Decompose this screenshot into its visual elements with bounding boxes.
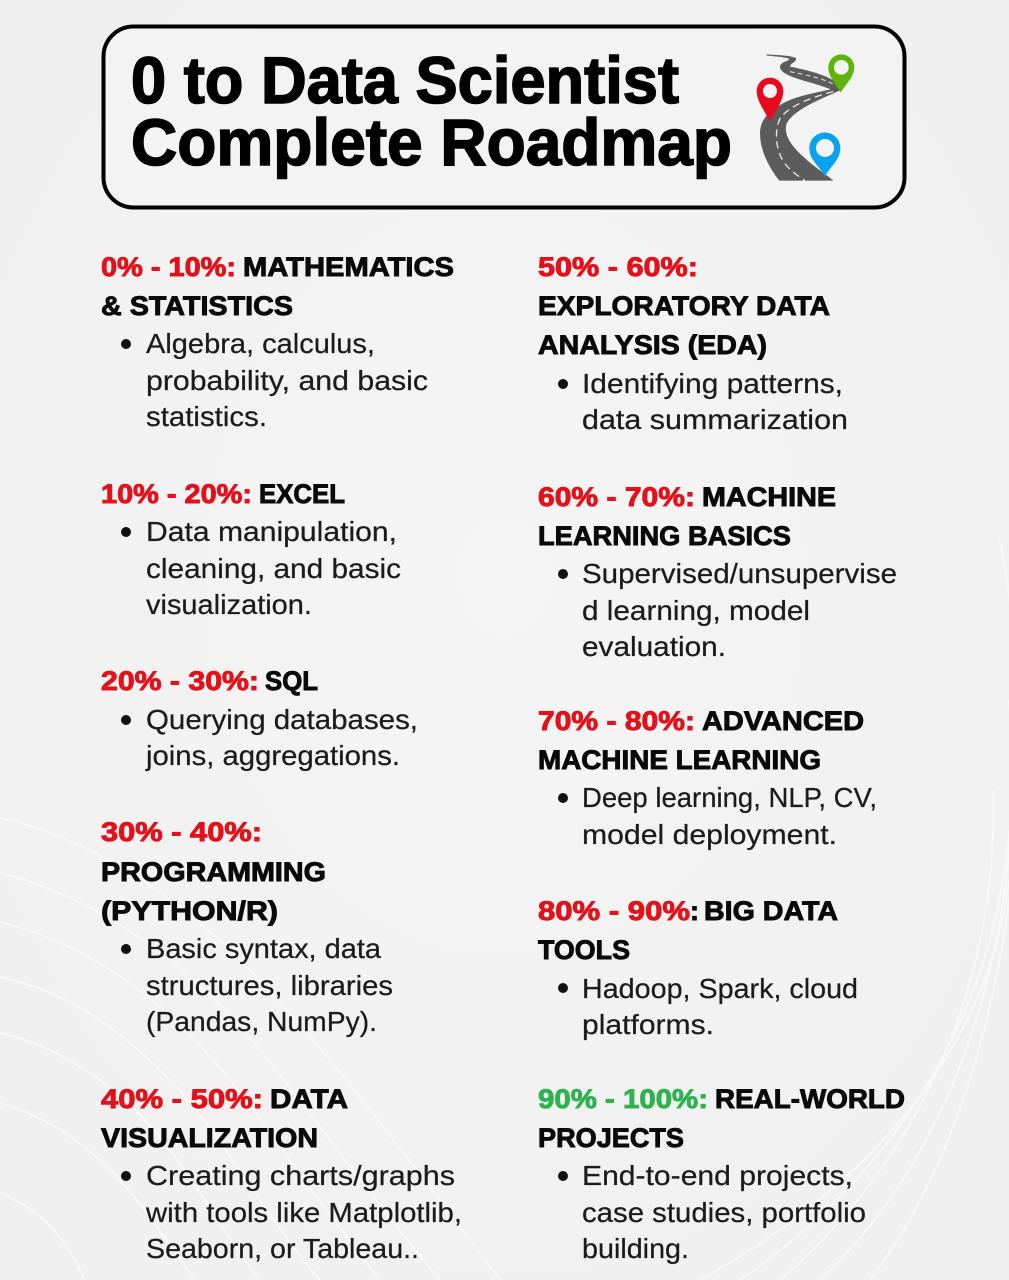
heading: 50% - 60%:	[538, 252, 698, 282]
bullet text: visualization.	[146, 589, 312, 620]
heading: 10% - 20%:	[101, 479, 252, 509]
heading	[101, 252, 454, 321]
heading	[538, 706, 864, 775]
bullet text	[121, 1160, 462, 1264]
heading: (PYTHON/R)	[101, 896, 278, 926]
heading: 30% - 40%:	[101, 817, 262, 847]
bullet text: structures, libraries	[146, 970, 393, 1001]
bullet text: (Pandas, NumPy).	[146, 1006, 377, 1037]
bullet text: joins, aggregations.	[145, 740, 400, 771]
bullet text	[558, 558, 897, 662]
bullet text: evaluation.	[582, 631, 726, 662]
heading: TOOLS	[538, 935, 630, 965]
heading	[538, 1084, 905, 1153]
heading: ADVANCED	[702, 706, 864, 736]
bullet text	[558, 973, 858, 1040]
heading: 60% - 70%:	[538, 482, 695, 512]
heading: EXPLORATORY DATA	[538, 291, 830, 321]
heading: LEARNING BASICS	[538, 521, 791, 551]
section: excel	[101, 479, 401, 620]
bullet text	[121, 933, 393, 1037]
bullet text: Querying databases,	[146, 704, 418, 735]
heading	[101, 817, 326, 926]
bullet text	[121, 704, 418, 771]
heading: BIG DATA	[704, 896, 838, 926]
title panel	[104, 26, 904, 208]
bullet text	[558, 782, 877, 850]
bullet text: Deep learning, NLP, CV,	[582, 782, 877, 813]
bullet text	[558, 1160, 866, 1264]
title: Complete Roadmap	[131, 105, 732, 179]
bullet text: platforms.	[582, 1009, 714, 1040]
bullet text: with tools like Matplotlib,	[145, 1197, 462, 1228]
heading: SQL	[265, 666, 318, 696]
heading	[101, 666, 318, 696]
bullet text: cleaning, and basic	[146, 553, 401, 584]
bullet text: data summarization	[582, 404, 848, 435]
heading: REAL-WORLD	[715, 1084, 905, 1114]
section: exploratory data analysis	[538, 252, 848, 435]
title: 0 to Data Scientist	[131, 43, 679, 117]
bullet text: Data manipulation,	[146, 516, 397, 547]
section: programming	[101, 817, 393, 1037]
heading: & STATISTICS	[101, 291, 293, 321]
heading: VISUALIZATION	[101, 1123, 318, 1153]
section: mathematics & statistics	[101, 252, 454, 432]
bullet text	[558, 368, 848, 435]
bullet text: statistics.	[146, 401, 267, 432]
icon: winding road with map pins	[757, 54, 854, 181]
bullet text: Supervised/unsupervise	[582, 558, 897, 589]
section: real-world projects	[538, 1084, 905, 1264]
heading: 20% - 30%:	[101, 666, 259, 696]
bullet text: Identifying patterns,	[582, 368, 843, 399]
bullet text: Creating charts/graphs	[146, 1160, 455, 1191]
section: machine learning basics	[538, 482, 897, 662]
bullet text: Algebra, calculus,	[146, 328, 375, 359]
bullet text: building.	[582, 1233, 689, 1264]
heading: 0% - 10%:	[101, 252, 236, 282]
section: sql	[101, 666, 418, 771]
heading: EXCEL	[259, 479, 345, 509]
bullet text	[121, 328, 428, 432]
heading: :	[690, 896, 699, 926]
heading: PROJECTS	[538, 1123, 684, 1153]
heading: PROGRAMMING	[101, 857, 326, 887]
heading: 90% - 100%:	[538, 1084, 708, 1114]
heading: MACHINE LEARNING	[538, 745, 821, 775]
bullet text: case studies, portfolio	[582, 1197, 866, 1228]
heading	[538, 252, 830, 360]
title	[131, 43, 732, 179]
heading: DATA	[270, 1084, 348, 1114]
heading: 80% - 90%	[538, 896, 690, 926]
bullet text	[121, 516, 401, 620]
heading	[101, 1084, 348, 1153]
heading: MACHINE	[702, 482, 836, 512]
heading: ANALYSIS (EDA)	[538, 330, 767, 360]
bullet text: d learning, model	[582, 595, 810, 626]
bullet text: End-to-end projects,	[582, 1160, 853, 1191]
bullet text: model deployment.	[582, 819, 837, 850]
bullet text: Seaborn, or Tableau..	[146, 1233, 419, 1264]
bullet text: Basic syntax, data	[146, 933, 381, 964]
section: big data tools	[538, 896, 858, 1040]
section: data visualization	[101, 1084, 462, 1264]
bullet text: Hadoop, Spark, cloud	[582, 973, 858, 1004]
heading: 40% - 50%:	[101, 1084, 263, 1114]
heading	[538, 482, 836, 551]
heading	[538, 896, 838, 965]
heading: 70% - 80%:	[538, 706, 695, 736]
section: advanced machine learning	[538, 706, 877, 850]
bullet text: probability, and basic	[146, 365, 428, 396]
heading: MATHEMATICS	[243, 252, 454, 282]
heading	[101, 479, 345, 509]
